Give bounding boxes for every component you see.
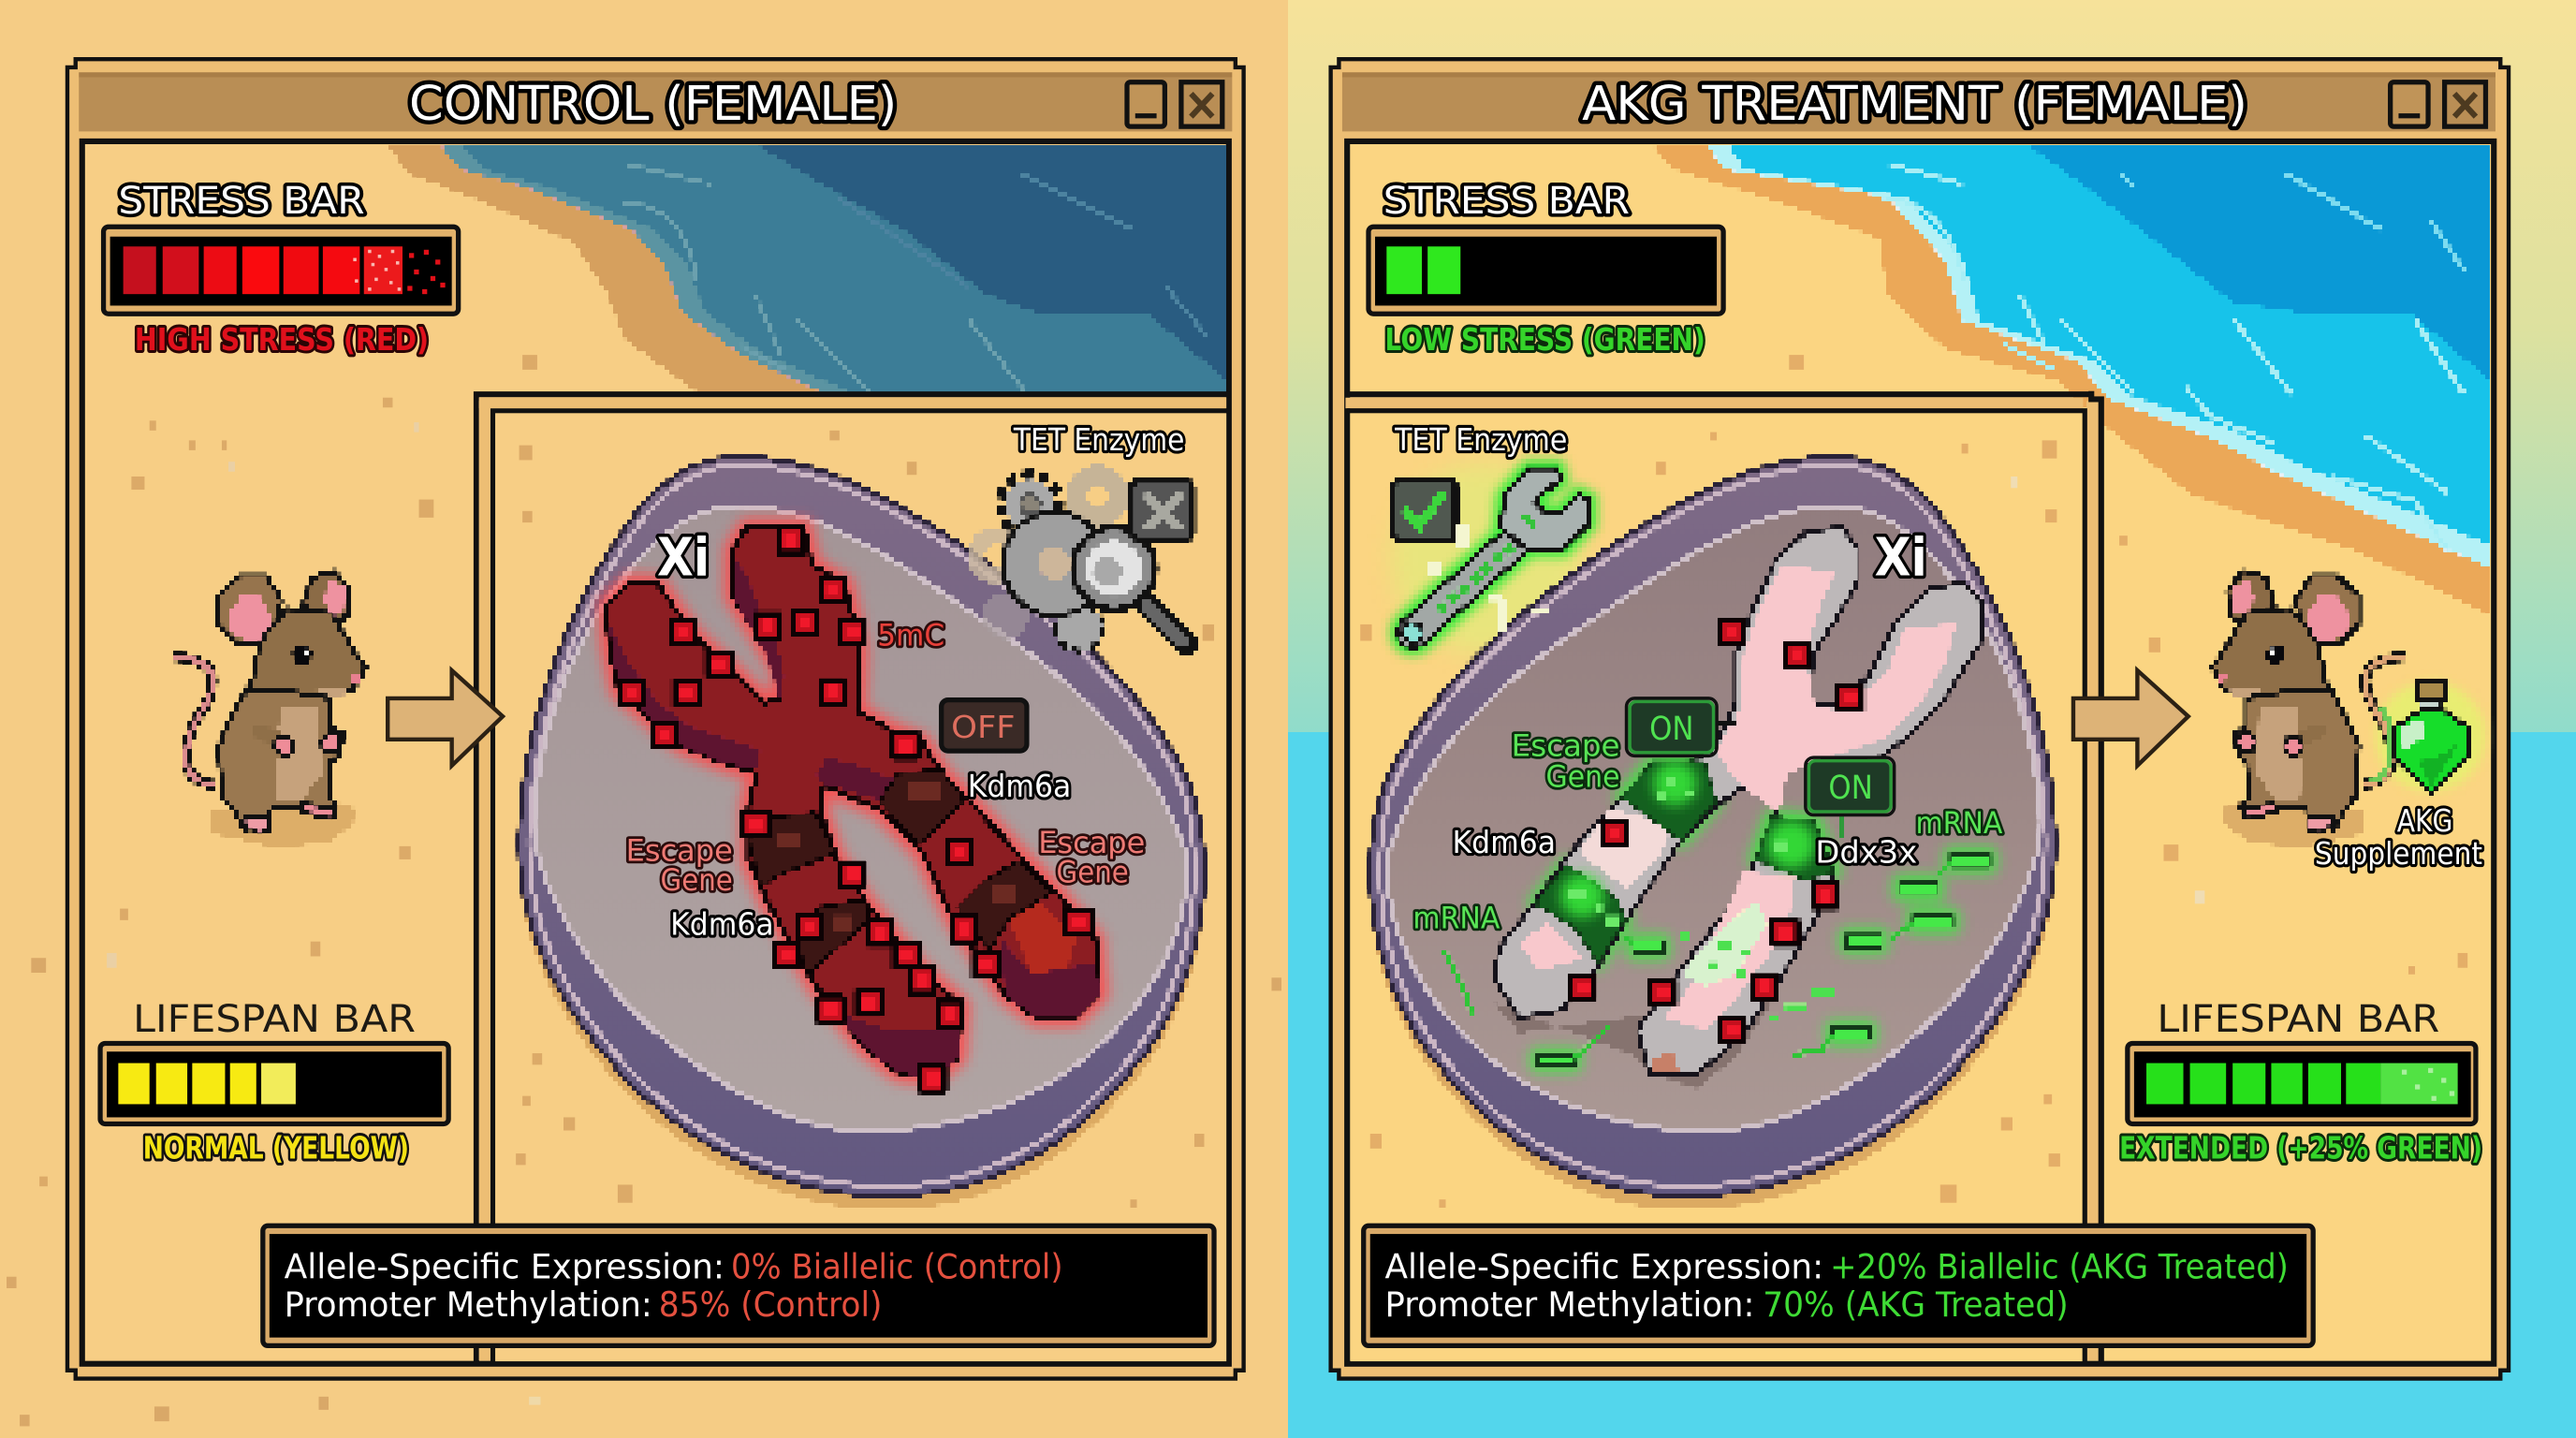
ON badge left: ON	[1649, 710, 1694, 748]
cell: treatment	[1370, 421, 2482, 1210]
promoter methylation line	[1385, 1284, 2069, 1325]
AKG potion bottle	[2394, 681, 2468, 793]
title bar: AKG treatment: AKG TREATMENT (FEMALE)	[1582, 77, 2247, 132]
background: gradient right half	[1288, 0, 2576, 732]
AKG Supplement label: AKG	[2397, 802, 2452, 839]
chromosome shadow	[1494, 998, 1776, 1089]
background: sandy left half	[0, 0, 1288, 1438]
allele expression line	[1385, 1246, 2289, 1286]
close button	[2445, 82, 2485, 126]
panel: control (female)	[39, 59, 1244, 1379]
OFF badge: OFF	[951, 709, 1016, 745]
allele expression line: 0% Biallelic (Control)	[731, 1246, 1063, 1286]
info box: control	[263, 1225, 1214, 1345]
Escape Gene right label: Escape	[1038, 827, 1145, 860]
sand specks control	[39, 355, 1214, 1208]
Escape Gene label: Gene	[1546, 761, 1620, 795]
mRNA strands	[1444, 855, 1990, 1065]
chromosome shape	[607, 527, 1099, 1077]
AKG Supplement label	[2315, 802, 2482, 872]
stress label: STRESS BAR	[1383, 179, 1630, 223]
connector lines	[1717, 718, 1736, 727]
allele expression line: +20% Biallelic (AKG Treated)	[1830, 1246, 2289, 1286]
TET enzyme active icon	[1393, 468, 1588, 642]
glows	[1535, 762, 1990, 1065]
cell labels: control	[626, 421, 1184, 943]
close button	[1181, 82, 1222, 126]
Escape Gene label: Escape	[1512, 729, 1620, 763]
5mC label: 5mC	[877, 620, 944, 653]
stress label: STRESS BAR	[118, 179, 365, 223]
beach sea	[386, 144, 1227, 394]
Escape Gene right label: Gene	[1057, 856, 1129, 889]
allele expression line: Allele-Specific Expression:	[1385, 1246, 1823, 1286]
window frame	[67, 59, 1244, 1379]
promoter methylation line: 85% (Control)	[659, 1284, 882, 1325]
ON badge left	[1627, 698, 1717, 756]
sand specks treatment	[1360, 355, 2467, 1208]
inner cell panel borders	[476, 394, 1231, 1362]
TET enzyme label: TET Enzyme	[1394, 421, 1567, 458]
sand specks outside panels	[7, 958, 1281, 1426]
TET enzyme inactive icon	[976, 475, 1193, 651]
check badge	[1393, 479, 1456, 540]
arrow: control to cell	[388, 670, 503, 766]
minimize button	[2391, 82, 2428, 126]
arrow: cell to mouse	[2073, 670, 2188, 766]
promoter methylation line: Promoter Methylation:	[285, 1284, 652, 1325]
promoter methylation line: Promoter Methylation:	[1385, 1284, 1754, 1325]
lifespan status text: EXTENDED (+25% GREEN)	[2119, 1129, 2482, 1166]
promoter methylation line	[285, 1284, 882, 1325]
chromosome shading	[608, 553, 1099, 1077]
Escape Gene label	[1512, 729, 1620, 795]
ON badge right: ON	[1828, 769, 1873, 807]
5mC methylation marks	[621, 528, 1091, 1091]
cell body with chromosome	[520, 457, 1204, 1210]
potion glow	[2376, 682, 2485, 791]
chromosome shape	[1494, 527, 1983, 1075]
title bar: control: CONTROL (FEMALE)	[409, 77, 897, 132]
lifespan bar: treatment	[2119, 997, 2482, 1166]
promoter methylation line: 70% (AKG Treated)	[1763, 1284, 2069, 1325]
AKG Supplement label: Supplement	[2315, 835, 2482, 872]
allele expression line: Allele-Specific Expression:	[285, 1246, 724, 1286]
wrench ambient glow	[1392, 463, 1582, 654]
mRNA label right: mRNA	[1915, 807, 2003, 841]
Escape Gene left label: Gene	[661, 864, 733, 898]
cell: control	[520, 421, 1204, 1210]
Escape Gene right label	[1038, 827, 1145, 889]
lifespan bar: control	[100, 997, 448, 1166]
mouse: control	[172, 571, 365, 847]
cell body with chromosome	[1370, 457, 2056, 1210]
stress bar: control	[104, 179, 459, 358]
minimize button	[1127, 82, 1164, 126]
Kdm6a label: Kdm6a	[1453, 824, 1556, 860]
TET enzyme label: TET Enzyme	[1013, 421, 1184, 458]
mouse and AKG potion	[2212, 571, 2485, 847]
window frame	[1331, 59, 2509, 1379]
Ddx3x label: Ddx3x	[1815, 833, 1917, 870]
stress status text: LOW STRESS (GREEN)	[1385, 321, 1705, 358]
info box: treatment	[1364, 1225, 2313, 1345]
lifespan label: LIFESPAN BAR	[2157, 997, 2439, 1041]
pink chromatin patches	[1519, 565, 1956, 1030]
Escape Gene left label: Escape	[626, 835, 733, 869]
background: cyan lower right	[1288, 732, 2576, 1438]
lifespan label: LIFESPAN BAR	[133, 997, 416, 1041]
5mC methylation marks	[1571, 621, 1863, 1042]
title bar: control	[409, 77, 1222, 132]
allele expression line	[285, 1246, 1063, 1286]
inner cell panel borders	[1345, 391, 2101, 1362]
OFF badge	[942, 700, 1027, 751]
ON badge right	[1806, 757, 1895, 815]
Xi label: Xi	[1875, 527, 1927, 588]
Xi label: Xi	[657, 527, 710, 588]
cell labels: treatment	[1394, 421, 2482, 936]
active escape-gene bands	[1535, 762, 1835, 962]
Kdm6a upper label: Kdm6a	[968, 768, 1071, 804]
sparkles	[1426, 526, 1547, 631]
stress bar: treatment	[1368, 179, 1723, 358]
stress status text: HIGH STRESS (RED)	[135, 321, 429, 358]
silenced escape-gene bands	[749, 770, 1052, 975]
mRNA label left: mRNA	[1412, 902, 1500, 936]
panel: AKG treatment (female)	[1331, 59, 2509, 1379]
Escape Gene left label	[626, 835, 733, 898]
Kdm6a lower label: Kdm6a	[670, 906, 774, 943]
lifespan status text: NORMAL (YELLOW)	[143, 1129, 409, 1166]
bright beach sea	[1653, 144, 2491, 614]
red glow	[607, 527, 1099, 1077]
